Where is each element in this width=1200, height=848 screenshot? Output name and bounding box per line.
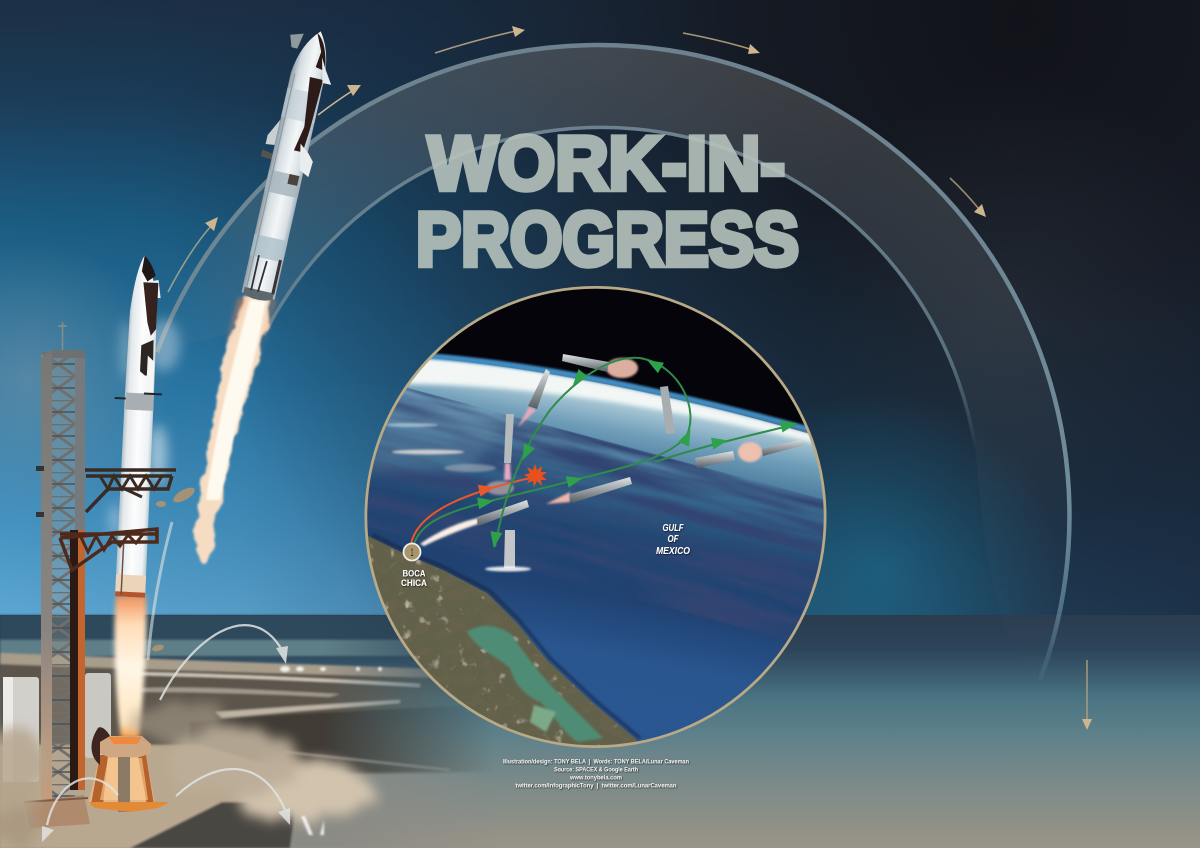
arrow 4 <box>683 33 760 54</box>
mini rocket: vertical stack <box>504 414 514 480</box>
heat shield <box>309 33 333 71</box>
title line 1: WORK-IN- <box>428 121 785 206</box>
title line 2: PROGRESS <box>416 197 799 282</box>
clouds <box>386 423 514 495</box>
debris arc lower left <box>42 778 118 842</box>
left shore: beach and sea foreground <box>0 615 520 848</box>
exhaust smoke <box>0 702 373 843</box>
green arrowheads <box>477 355 798 549</box>
label: Boca Chica <box>401 568 427 589</box>
flaps behind body <box>266 118 280 146</box>
arrow 5 <box>950 178 986 217</box>
credits <box>503 758 689 790</box>
mini rocket: falling booster <box>660 386 675 434</box>
upper arm <box>85 470 176 512</box>
mini rocket: rising ship <box>518 369 550 427</box>
green path: main <box>414 358 690 547</box>
credits: www.tonybela.com <box>569 774 622 782</box>
rocket plume on the pad <box>114 596 146 738</box>
left haze over the ocean <box>372 402 506 472</box>
lagoon <box>467 626 603 742</box>
chunk rising arrow <box>148 522 172 660</box>
arrows along the flight arc <box>168 26 1092 730</box>
arrow 6 <box>1082 660 1092 730</box>
label: Gulf of Mexico: GULF <box>662 523 684 534</box>
label: Gulf of Mexico: MEXICO <box>656 546 690 557</box>
launch mount <box>24 727 170 828</box>
credits: Source: SPACEX & Google Earth <box>554 766 638 774</box>
title <box>416 121 799 282</box>
space <box>432 288 808 434</box>
starship on the pad <box>105 254 169 598</box>
launch smoke puffs around the pad rocket <box>110 319 180 536</box>
debris arc right <box>160 625 288 700</box>
antenna <box>58 322 67 352</box>
mini rocket: ascent with exhaust <box>420 500 529 546</box>
launch tower <box>36 322 85 814</box>
tanks <box>3 673 111 782</box>
orange tower column <box>70 530 78 790</box>
map circle <box>364 286 826 748</box>
ocean streaks <box>368 388 824 638</box>
splashes <box>280 666 382 835</box>
mini rocket: mid stage <box>546 477 632 504</box>
falling debris arrows and splashes <box>42 485 382 842</box>
orange path <box>411 478 530 544</box>
label: Boca Chica: BOCA <box>402 568 426 580</box>
flight paths <box>411 355 798 549</box>
launch site marker: 1 <box>410 547 414 559</box>
credits: twitter.com/InfographicTony | twitter.com/LunarCaveman <box>516 782 676 790</box>
atmosphere limb <box>380 355 815 443</box>
trajectory arc band <box>157 44 1070 680</box>
label: Gulf of Mexico <box>656 523 690 557</box>
outer arc <box>157 45 1069 680</box>
explosion <box>524 464 547 487</box>
flying starship <box>230 24 342 305</box>
tower arms <box>60 470 176 570</box>
debris arc lower right <box>176 769 290 825</box>
mini rocket: ship pair <box>695 439 804 468</box>
ocean <box>360 340 830 750</box>
mini rocket: ship boostback <box>562 354 638 378</box>
launch site marker <box>404 544 420 560</box>
arrow 1 <box>168 217 218 292</box>
flying debris discs <box>151 485 197 652</box>
land <box>368 536 637 746</box>
label: Boca Chica: CHICA <box>401 578 427 589</box>
flying starship plume <box>195 296 276 563</box>
circle border <box>366 288 825 746</box>
credits: Illustration/design: TONY BELA | Words: TONY BELA/Lunar Caveman <box>503 758 689 766</box>
green path: branch <box>655 424 797 462</box>
label: Gulf of Mexico: OF <box>668 534 679 545</box>
mini rocket: splashdown <box>485 530 531 572</box>
inner arc <box>264 127 975 448</box>
mini rockets <box>420 354 804 572</box>
lower arm <box>60 529 157 570</box>
arrow 3 <box>435 26 525 53</box>
arrow 2 <box>318 85 361 115</box>
